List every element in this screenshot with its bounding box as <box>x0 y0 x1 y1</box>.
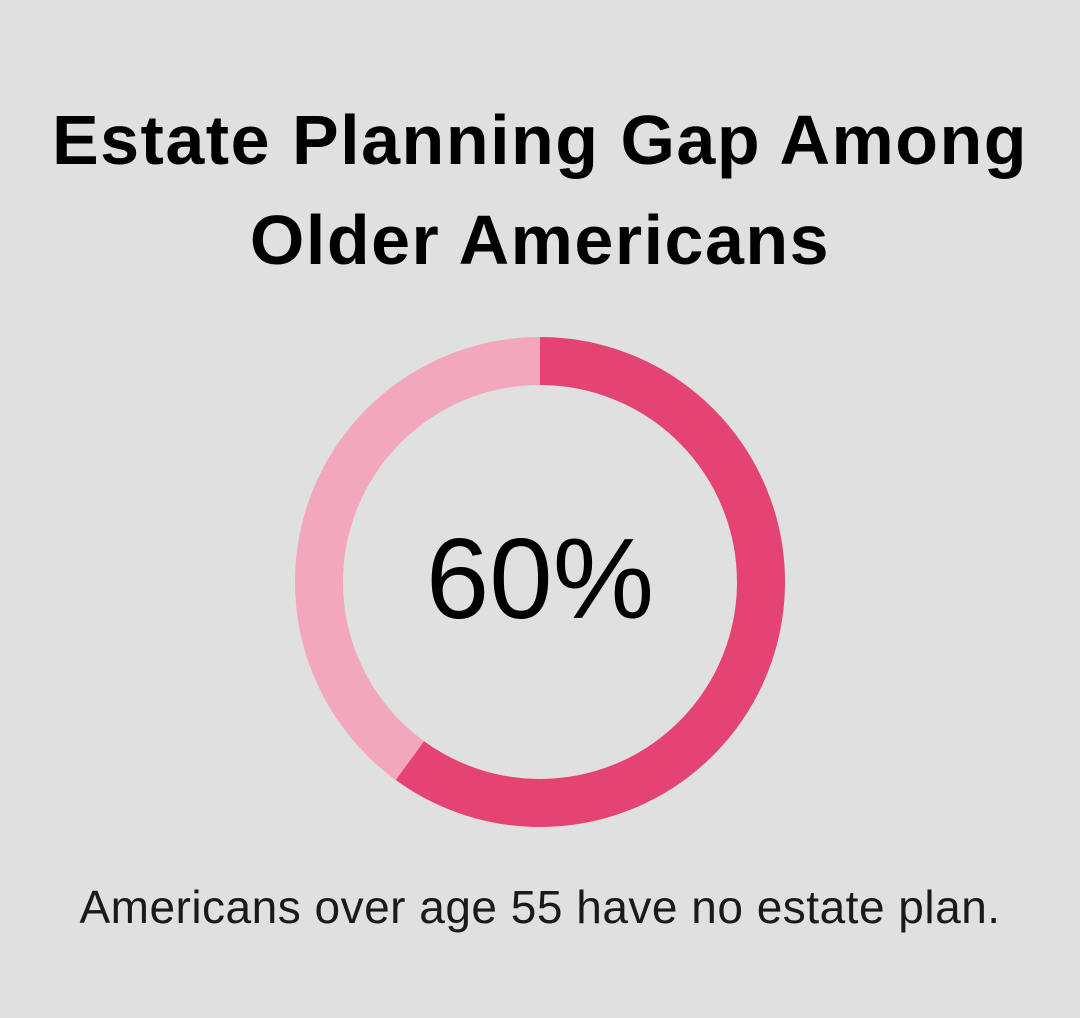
center value: 60% <box>426 516 654 643</box>
donut chart <box>295 337 785 827</box>
caption: Americans over age 55 have no estate plan. <box>79 881 1001 933</box>
title: Estate Planning Gap Among <box>52 101 1028 179</box>
title <box>52 101 1028 279</box>
donut main segment (60%) <box>319 361 761 803</box>
donut remainder segment (40%) <box>319 361 761 803</box>
title: Older Americans <box>250 201 830 279</box>
